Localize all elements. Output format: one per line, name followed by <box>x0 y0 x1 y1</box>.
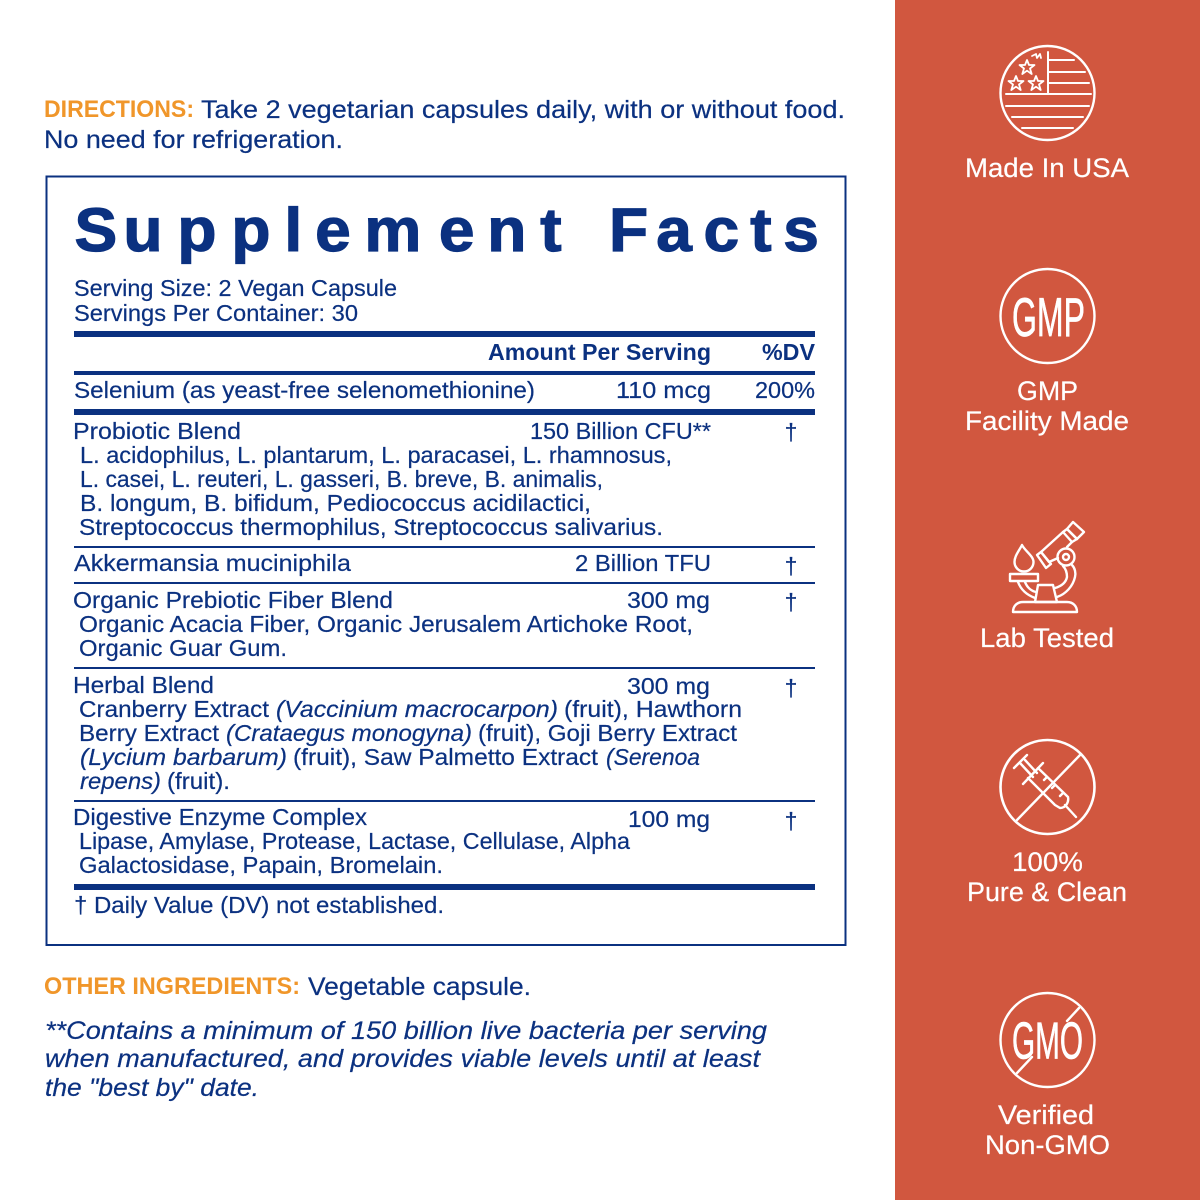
row: akkermansia: † <box>785 553 797 579</box>
row: digestive enzyme complex <box>73 804 797 878</box>
row: selenium <box>74 377 815 403</box>
row: herbal blend: (fruit), Hawthorn <box>564 696 742 722</box>
icon: microscope <box>1010 522 1084 612</box>
other ingredients: Vegetable capsule. <box>308 973 531 1001</box>
serving information: Servings Per Container: 30 <box>74 300 358 326</box>
heading: Supplement Facts: Supplement <box>75 196 562 265</box>
row: herbal blend: (Serenoa <box>606 744 700 770</box>
label: Made In USA: Made In USA <box>965 153 1129 183</box>
row: organic prebiotic fiber blend: Organic Guar Gum. <box>79 635 287 661</box>
heading: Supplement Facts: Facts <box>609 196 819 265</box>
icon: no GMO: GMO <box>1012 1012 1083 1070</box>
icon: GMP: GMP <box>1012 286 1085 348</box>
label: Verified Non-GMO: Non-GMO <box>985 1130 1110 1160</box>
serving information: Serving Size: 2 Vegan Capsule <box>74 275 397 301</box>
row: probiotic blend: L. casei, L. reuteri, L. gasseri, B. breve, B. animalis, <box>80 466 603 492</box>
table header: Amount Per Serving <box>488 339 711 365</box>
label: Verified Non-GMO <box>985 1100 1110 1160</box>
row: probiotic blend: † <box>785 419 797 445</box>
row: probiotic blend: 150 Billion CFU** <box>530 418 711 444</box>
icon: no syringe <box>1000 740 1094 834</box>
label: GMP Facility Made <box>965 376 1129 436</box>
row: herbal blend: Cranberry Extract <box>79 696 270 722</box>
label: 100% Pure & Clean: 100% <box>1012 847 1083 877</box>
row: probiotic blend <box>73 418 797 540</box>
row: organic prebiotic fiber blend: 300 mg <box>627 587 710 613</box>
row: herbal blend: Herbal Blend <box>73 672 214 698</box>
label: 100% Pure & Clean: Pure & Clean <box>967 877 1127 907</box>
directions text: Take 2 vegetarian capsules daily, with or without food. <box>201 96 845 124</box>
row: selenium: Selenium (as yeast-free selenomethionine) <box>74 377 535 403</box>
label: 100% Pure & Clean <box>967 847 1127 907</box>
label: Verified Non-GMO: Verified <box>998 1100 1094 1130</box>
row: digestive enzyme complex: † <box>785 808 797 834</box>
row: akkermansia: 2 Billion TFU <box>575 550 711 576</box>
row: organic prebiotic fiber blend: † <box>785 589 797 615</box>
panel: supplement facts <box>46 176 846 945</box>
row: organic prebiotic fiber blend <box>73 587 797 661</box>
label: Lab Tested: Lab Tested <box>980 623 1114 653</box>
row: digestive enzyme complex: Lipase, Amylase, Protease, Lactase, Cellulase, Alpha <box>79 828 630 854</box>
serving information <box>74 275 397 326</box>
row: herbal blend: (Vaccinium macrocarpon) <box>276 696 558 722</box>
row: selenium: 200% <box>755 377 815 403</box>
row: herbal blend: (fruit), Saw Palmetto Extract <box>293 744 599 770</box>
note: live bacteria <box>45 1017 767 1102</box>
row: herbal blend: (fruit), Goji Berry Extract <box>478 720 738 746</box>
icon: USA flag <box>1000 46 1094 140</box>
row: organic prebiotic fiber blend: Organic Acacia Fiber, Organic Jerusalem Artichoke Root, <box>79 611 693 637</box>
row: herbal blend: (Lycium barbarum) <box>80 744 287 770</box>
footnote: daily value: † Daily Value (DV) not established. <box>74 892 444 918</box>
note: live bacteria: **Contains a minimum of 150 billion live bacteria per serving <box>45 1017 767 1045</box>
row: akkermansia: Akkermansia muciniphila <box>74 550 351 576</box>
label: GMP Facility Made: GMP <box>1017 376 1078 406</box>
table header: %DV <box>762 339 816 365</box>
row: akkermansia <box>74 550 797 579</box>
panel: badges sidebar <box>895 0 1200 1200</box>
icon: no GMO <box>1000 993 1094 1087</box>
row: selenium: 110 mcg <box>616 377 711 403</box>
heading: Supplement Facts <box>75 196 819 265</box>
row: herbal blend: (Crataegus monogyna) <box>226 720 472 746</box>
row: digestive enzyme complex: 100 mg <box>628 806 710 832</box>
directions text: No need for refrigeration. <box>44 126 343 154</box>
row: probiotic blend: Streptococcus thermophilus, Streptococcus salivarius. <box>79 514 663 540</box>
row: herbal blend: repens) <box>80 768 161 794</box>
row: probiotic blend: L. acidophilus, L. plantarum, L. paracasei, L. rhamnosus, <box>80 442 672 468</box>
icon: GMP <box>1000 269 1094 363</box>
directions text: DIRECTIONS: <box>44 96 194 123</box>
row: herbal blend <box>73 672 797 794</box>
row: herbal blend: (fruit). <box>167 768 230 794</box>
row: probiotic blend: Probiotic Blend <box>73 418 241 444</box>
directions text <box>44 96 845 154</box>
note: live bacteria: the "best by" date. <box>45 1074 259 1102</box>
row: herbal blend: † <box>785 675 797 701</box>
table header <box>488 339 816 365</box>
other ingredients <box>44 973 531 1001</box>
row: digestive enzyme complex: Digestive Enzyme Complex <box>73 804 368 830</box>
row: herbal blend: 300 mg <box>627 673 710 699</box>
row: herbal blend: Berry Extract <box>79 720 220 746</box>
row: probiotic blend: B. longum, B. bifidum, Pediococcus acidilactici, <box>80 490 591 516</box>
row: digestive enzyme complex: Galactosidase, Papain, Bromelain. <box>79 852 443 878</box>
label: GMP Facility Made: Facility Made <box>965 406 1129 436</box>
row: organic prebiotic fiber blend: Organic Prebiotic Fiber Blend <box>73 587 393 613</box>
note: live bacteria: when manufactured, and provides viable levels until at least <box>45 1045 761 1073</box>
other ingredients: OTHER INGREDIENTS: <box>44 973 300 1000</box>
